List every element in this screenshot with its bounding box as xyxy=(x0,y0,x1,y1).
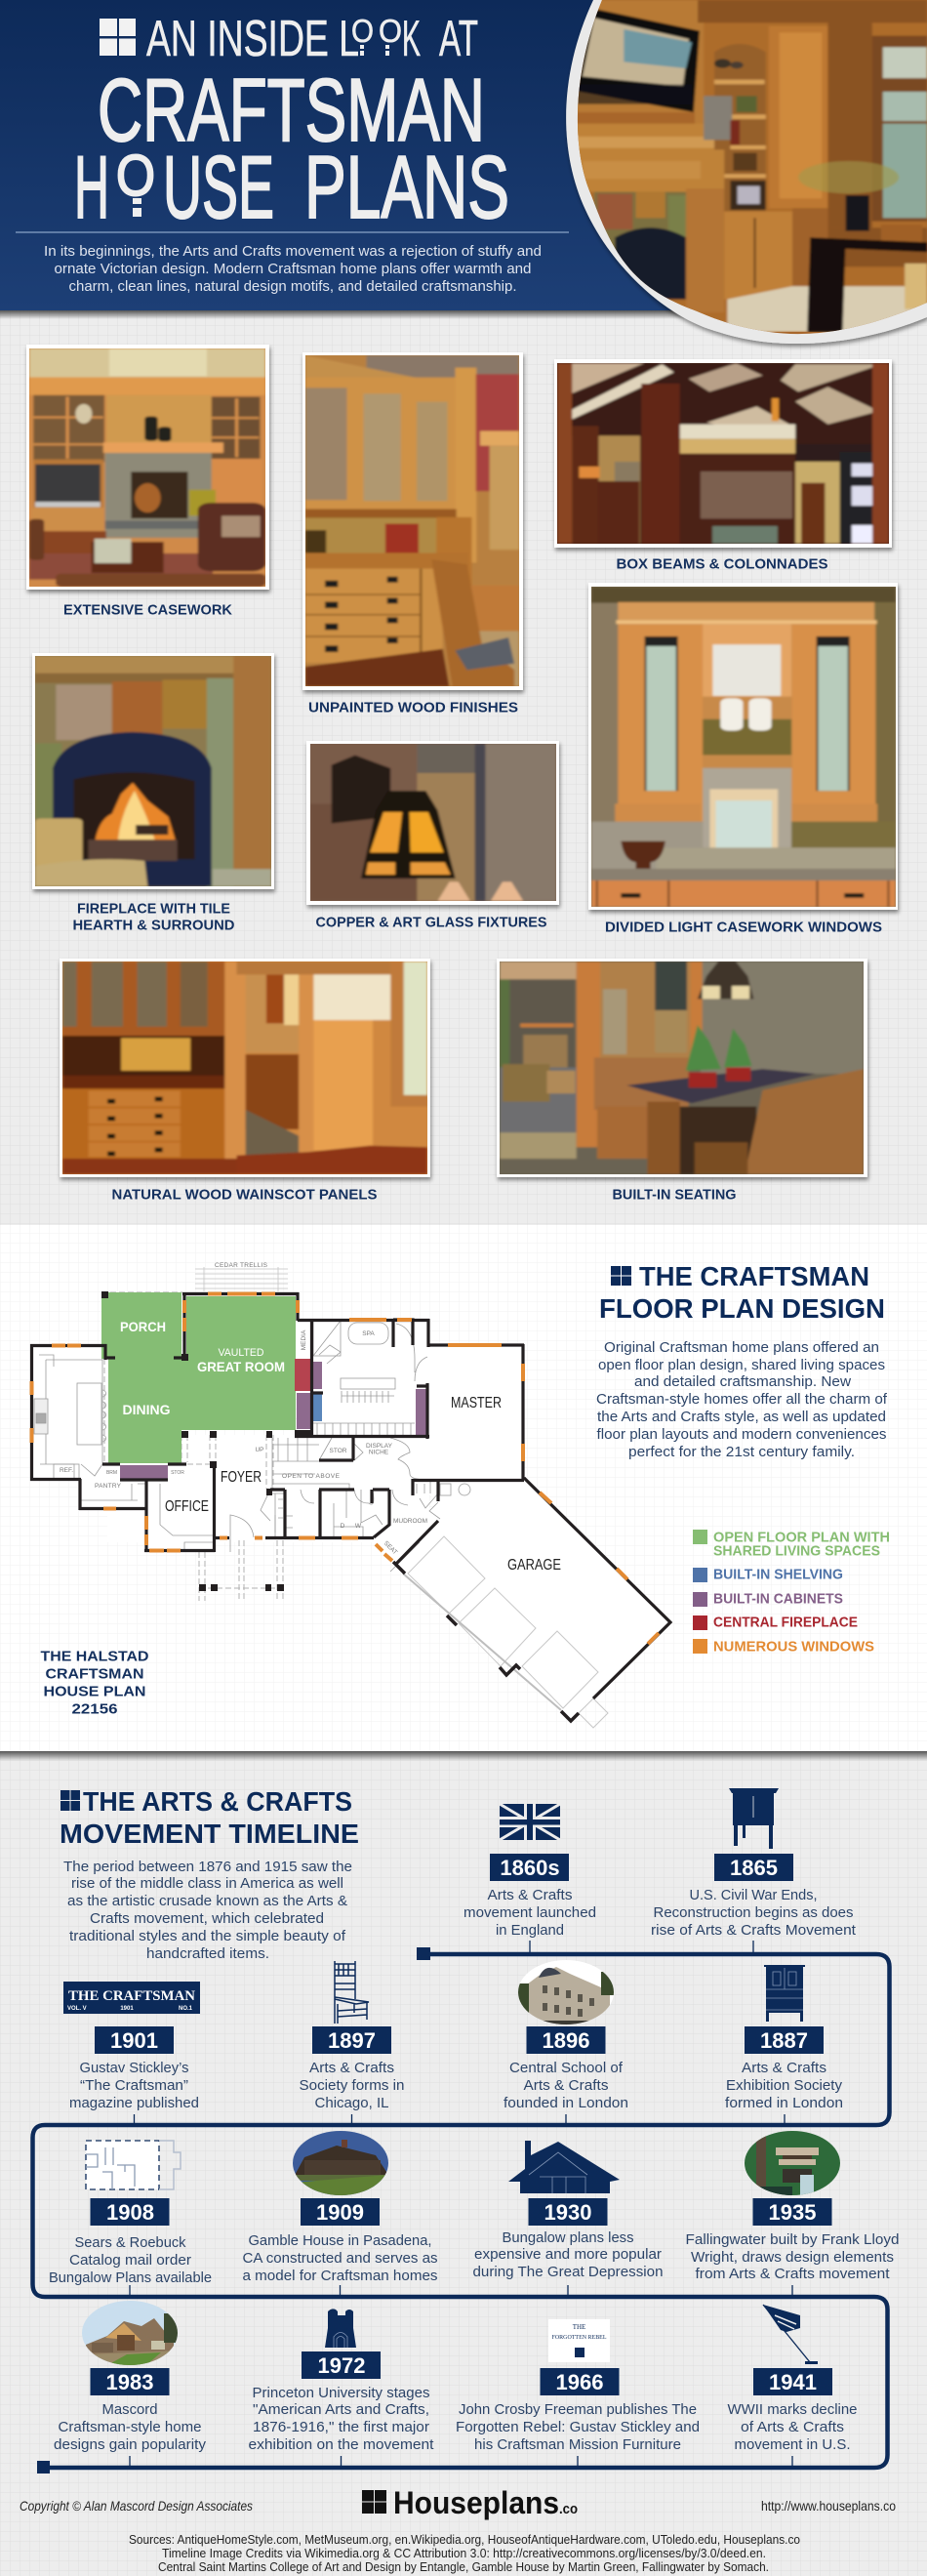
event: 1966: John Crosby Freeman publishes The xyxy=(459,2401,697,2418)
caption: BUILT-IN SEATING xyxy=(613,1187,736,1203)
event: 1930: during The Great Depression xyxy=(472,2264,664,2280)
event: 1860s: movement launched xyxy=(464,1904,596,1921)
event: 1896: founded in London xyxy=(504,2095,628,2111)
event: 1887: 1887 xyxy=(760,2028,808,2053)
photo ring xyxy=(566,0,927,344)
event: 1941: movement in U.S. xyxy=(734,2436,851,2453)
caption: EXTENSIVE CASEWORK xyxy=(63,601,232,619)
event: 1897: Chicago, IL xyxy=(314,2095,388,2111)
legend: numerous windows: NUMEROUS WINDOWS xyxy=(713,1638,874,1656)
timeline intro: Crafts movement, which celebrated xyxy=(90,1910,324,1927)
icon: window xyxy=(60,1790,80,1811)
icon: castle gate xyxy=(325,2309,356,2348)
floor plan text block: the Arts and Crafts style, as well as updated xyxy=(597,1409,886,1425)
event: 1909: Gamble House in Pasadena, xyxy=(248,2232,431,2249)
event: 1966 xyxy=(456,2319,700,2453)
event: 1887 xyxy=(725,1965,843,2111)
event: 1972 xyxy=(248,2309,434,2453)
built-in shelving xyxy=(311,1392,322,1421)
legend: built-in shelving: BUILT-IN SHELVING xyxy=(713,1566,843,1583)
floor plan text block: Craftsman-style homes offer all the charm of xyxy=(596,1391,888,1408)
caption: FIREPLACE WITH TILE xyxy=(77,900,230,918)
room labels: MEDIA xyxy=(301,1329,307,1350)
icon: tall cabinet xyxy=(764,1965,805,2022)
photo: fireplace with tile hearth xyxy=(32,653,274,889)
floor plan text block: perfect for the 21st century family. xyxy=(628,1444,855,1460)
room labels: STOR xyxy=(330,1448,347,1454)
event: 1901: magazine published xyxy=(69,2095,199,2111)
intro text: ornate Victorian design. Modern Craftsman home plans offer warmth and xyxy=(55,262,531,277)
event: 1983: Mascord xyxy=(101,2401,158,2418)
room labels: UP xyxy=(255,1447,264,1453)
central fireplace xyxy=(295,1359,310,1391)
legend: open floor plan: SHARED LIVING SPACES xyxy=(713,1542,880,1560)
heading: FLOOR PLAN DESIGN xyxy=(599,1293,885,1324)
event: 1897: Society forms in xyxy=(299,2077,404,2094)
house footprint xyxy=(32,1320,670,1721)
icon: window xyxy=(611,1266,631,1286)
room labels: OFFICE xyxy=(165,1498,209,1515)
timeline line xyxy=(33,1941,890,2474)
event: 1901: 1901 xyxy=(110,2028,158,2053)
caption: UNPAINTED WOOD FINISHES xyxy=(308,699,518,716)
heading: THE CRAFTSMAN xyxy=(639,1261,869,1291)
event: 1983: 1983 xyxy=(106,2370,153,2394)
icon: magazine masthead: VOL. V xyxy=(67,2006,87,2012)
event: 1966: his Craftsman Mission Furniture xyxy=(474,2436,681,2453)
event: 1930 xyxy=(472,2141,664,2280)
room labels: DINING xyxy=(123,1402,171,1417)
room labels: FOYER xyxy=(221,1469,262,1486)
caption: DIVIDED LIGHT CASEWORK WINDOWS xyxy=(605,920,882,935)
event: 1972: "American Arts and Crafts, xyxy=(253,2401,429,2418)
plan name: CRAFTSMAN xyxy=(45,1665,144,1683)
event: 1901: “The Craftsman” xyxy=(80,2077,188,2094)
intro text: charm, clean lines, natural design motifs, and detailed craftsmanship. xyxy=(68,279,517,295)
room labels: NICHE xyxy=(369,1449,389,1456)
icon: bungalow plan xyxy=(86,2141,181,2189)
intro text xyxy=(44,244,542,295)
caption: NATURAL WOOD WAINSCOT PANELS xyxy=(111,1187,377,1203)
sources: Central Saint Martins College of Art and Design by Entangle, Gamble House by Martin Green, Fallingwater by Somach. xyxy=(158,2559,769,2574)
panel: floor plan section xyxy=(0,1225,927,1761)
windows xyxy=(31,1294,659,1644)
icon: magazine masthead: THE CRAFTSMAN xyxy=(68,1988,195,2004)
event: 1908: Catalog mail order xyxy=(69,2252,191,2269)
icon: cabinet xyxy=(729,1788,779,1849)
room labels: PANTRY xyxy=(95,1483,122,1490)
room labels xyxy=(60,1262,561,1574)
panel: header xyxy=(0,0,927,344)
title: AN INSIDE L xyxy=(146,11,359,67)
event: 1930: 1930 xyxy=(544,2200,591,2225)
title: CRAFTSMAN xyxy=(98,61,485,160)
event: 1865: rise of Arts & Crafts Movement xyxy=(651,1922,857,1939)
event: 1941: 1941 xyxy=(769,2370,817,2394)
event: 1860s: in England xyxy=(496,1922,564,1939)
room labels: SEAT xyxy=(383,1540,398,1556)
icon: bungalow house xyxy=(508,2141,620,2193)
timeline intro: rise of the middle class in America as well xyxy=(71,1875,343,1892)
photo: mascord home xyxy=(82,2301,178,2365)
event: 1897 xyxy=(299,1961,404,2111)
intro text: In its beginnings, the Arts and Crafts movement was a rejection of stuffy and xyxy=(44,244,542,260)
title: O xyxy=(379,13,402,49)
title: USE xyxy=(163,139,274,237)
event: 1887: Arts & Crafts xyxy=(742,2060,826,2076)
event: 1896: Central School of xyxy=(509,2060,624,2076)
dashed porch lines xyxy=(101,1292,283,1601)
logo: .co xyxy=(559,2501,578,2517)
floor plan xyxy=(30,1262,670,1728)
icon: chair xyxy=(335,1961,369,2024)
room labels: SPA xyxy=(362,1330,375,1337)
photo: gamble house xyxy=(293,2131,388,2196)
sources: Timeline Image Credits via Wikimedia.org & CC Attribution 3.0: http://creativecommons.org/licenses/by/3.0/deed.en. xyxy=(162,2546,766,2560)
event: 1930: expensive and more popular xyxy=(474,2246,662,2263)
event: 1909: CA constructed and serves as xyxy=(242,2250,437,2267)
url: http://www.houseplans.co xyxy=(761,2498,896,2514)
built-in cabinets xyxy=(120,1362,428,1479)
room labels: REF. xyxy=(60,1467,73,1474)
event: 1966: Forgotten Rebel: Gustav Stickley and xyxy=(456,2419,700,2435)
photo: natural wood wainscot panels xyxy=(60,959,430,1177)
room labels: DISPLAY xyxy=(366,1443,393,1450)
timeline intro: The period between 1876 and 1915 saw the xyxy=(63,1859,352,1875)
heading: THE ARTS & CRAFTS xyxy=(83,1786,352,1817)
legend: built-in cabinets: BUILT-IN CABINETS xyxy=(713,1591,843,1607)
timeline intro xyxy=(63,1859,352,1962)
timeline intro: traditional styles and the simple beauty of xyxy=(69,1928,346,1944)
photo: copper and art glass fixtures xyxy=(306,741,559,905)
event: 1887: formed in London xyxy=(725,2095,843,2111)
icon: magazine masthead: 1901 xyxy=(120,2006,134,2012)
event: 1909: 1909 xyxy=(316,2200,364,2225)
legend: central fireplace: CENTRAL FIREPLACE xyxy=(713,1615,858,1630)
event: 1983 xyxy=(54,2301,207,2453)
event: 1930: Bungalow plans less xyxy=(502,2229,634,2246)
icon: magazine masthead xyxy=(63,1982,200,2014)
legend xyxy=(693,1529,890,1656)
footer xyxy=(20,2485,896,2574)
room labels: STOR xyxy=(171,1470,184,1476)
photo: divided light casework windows xyxy=(588,583,898,910)
icon: book cover: THE xyxy=(573,2323,585,2331)
room labels: BRM xyxy=(106,1470,117,1476)
icon: magazine masthead: NO.1 xyxy=(179,2006,193,2012)
event: 1860s: 1860s xyxy=(500,1856,560,1880)
heading xyxy=(60,1786,359,1849)
caption xyxy=(72,900,235,933)
event: 1972: Princeton University stages xyxy=(252,2385,429,2401)
icon: window xyxy=(100,19,136,56)
walls xyxy=(30,1292,670,1698)
heading xyxy=(599,1261,885,1324)
event: 1860s: Arts & Crafts xyxy=(488,1887,572,1903)
event: 1935: 1935 xyxy=(769,2200,816,2225)
icon: flag xyxy=(763,2305,818,2364)
copyright: Copyright © Alan Mascord Design Associates xyxy=(20,2498,253,2514)
event: 1908: Bungalow Plans available xyxy=(49,2269,212,2286)
plan name: 22156 xyxy=(72,1700,117,1718)
thin interior lines xyxy=(34,1267,470,1572)
room labels: MUDROOM xyxy=(393,1518,427,1525)
event: 1935 xyxy=(685,2131,900,2282)
timeline intro: handcrafted items. xyxy=(146,1945,269,1962)
room labels: D xyxy=(341,1523,345,1530)
plan name: HOUSE PLAN xyxy=(43,1683,146,1700)
photo: box beams and colonnades xyxy=(554,359,892,548)
plan name xyxy=(41,1648,149,1718)
room labels: CEDAR TRELLIS xyxy=(215,1262,268,1269)
event: 1983: designs gain popularity xyxy=(54,2436,207,2453)
photo: central school building xyxy=(518,1960,614,2024)
event: 1935: Wright, draws design elements xyxy=(691,2249,894,2266)
event: 1896 xyxy=(504,1960,628,2111)
title: PLANS xyxy=(304,139,509,237)
event: 1972: 1972 xyxy=(318,2353,365,2378)
photo: interior with fireplace and built-ins xyxy=(556,0,927,342)
event: 1983: Craftsman-style home xyxy=(59,2419,201,2435)
sources: Sources: AntiqueHomeStyle.com, MetMuseum.org, en.Wikipedia.org, HouseofAntiqueHardware.com, UToledo.edu, Houseplans.co xyxy=(129,2532,800,2547)
room labels: MASTER xyxy=(451,1395,502,1411)
timeline intro: as the artistic crusade known as the Arts & xyxy=(67,1893,347,1909)
floor plan text block xyxy=(596,1339,888,1460)
event: 1901: Gustav Stickley’s xyxy=(80,2060,189,2076)
heading: MOVEMENT TIMELINE xyxy=(60,1819,359,1849)
event: 1865: Reconstruction begins as does xyxy=(654,1904,853,1921)
sources xyxy=(129,2532,800,2574)
icon: book cover: FORGOTTEN REBEL xyxy=(552,2334,607,2341)
room labels: VAULTED xyxy=(219,1347,264,1359)
floor plan text block: Original Craftsman home plans offered an xyxy=(604,1339,879,1356)
photo: fallingwater xyxy=(744,2131,840,2195)
title xyxy=(74,11,509,237)
caption: COPPER & ART GLASS FIXTURES xyxy=(316,914,546,931)
room labels: PORCH xyxy=(120,1319,166,1334)
event: 1908 xyxy=(49,2141,212,2286)
event: 1865: U.S. Civil War Ends, xyxy=(689,1887,818,1903)
photo: built-in seating xyxy=(497,959,867,1177)
icon: book cover xyxy=(548,2319,610,2362)
floor plan text block: open floor plan design, shared living spaces xyxy=(598,1357,885,1373)
title: K xyxy=(402,11,421,67)
event: 1941: WWII marks decline xyxy=(728,2401,857,2418)
room labels: GARAGE xyxy=(507,1557,561,1574)
event: 1897: Arts & Crafts xyxy=(309,2060,394,2076)
event: 1909: a model for Craftsman homes xyxy=(242,2268,437,2284)
event: 1897: 1897 xyxy=(328,2028,376,2053)
event: 1887: Exhibition Society xyxy=(726,2077,842,2094)
event: 1896: Arts & Crafts xyxy=(523,2077,609,2094)
room labels: W xyxy=(355,1523,362,1530)
event: 1865: 1865 xyxy=(730,1856,778,1880)
icon: union jack xyxy=(500,1804,560,1840)
room labels: GREAT ROOM xyxy=(197,1359,285,1374)
logo: Houseplans xyxy=(393,2485,559,2520)
event: 1909 xyxy=(242,2131,437,2284)
legend: open floor plan xyxy=(693,1529,890,1560)
title: O xyxy=(116,143,155,208)
event: 1941 xyxy=(728,2305,857,2453)
photo: extensive casework xyxy=(26,345,269,590)
event: 1935: from Arts & Crafts movement xyxy=(695,2266,890,2282)
event: 1908: Sears & Roebuck xyxy=(74,2234,186,2251)
floor plan text block: and detailed craftsmanship. New xyxy=(634,1373,851,1390)
event: 1941: of Arts & Crafts xyxy=(741,2419,844,2435)
open plan shading xyxy=(101,1292,296,1463)
room labels: OPEN TO ABOVE xyxy=(282,1473,341,1480)
event: 1972: 1876-1916," the first major xyxy=(253,2419,429,2435)
plan name: THE HALSTAD xyxy=(41,1648,149,1665)
photo: unpainted wood finishes xyxy=(302,352,523,690)
title: AT xyxy=(439,11,478,67)
event: 1908: 1908 xyxy=(106,2200,154,2225)
garage bays xyxy=(403,1536,608,1728)
legend: open floor plan: OPEN FLOOR PLAN WITH xyxy=(713,1529,890,1546)
event: 1865 xyxy=(651,1788,857,1939)
panel: timeline xyxy=(33,1786,900,2474)
caption: BOX BEAMS & COLONNADES xyxy=(617,556,827,572)
event: 1860s xyxy=(464,1804,596,1939)
event: 1935: Fallingwater built by Frank Lloyd xyxy=(685,2231,900,2248)
event: 1966: 1966 xyxy=(556,2370,603,2394)
event: 1896: 1896 xyxy=(543,2028,589,2053)
wall corner blocks xyxy=(101,1291,310,1591)
title: H xyxy=(74,139,109,237)
caption: HEARTH & SURROUND xyxy=(72,918,235,933)
event: 1972: exhibition on the movement xyxy=(248,2436,434,2453)
floor plan text block: floor plan layouts and modern conveniences xyxy=(597,1426,886,1443)
title: O xyxy=(351,13,374,49)
event: 1901 xyxy=(63,1982,200,2111)
